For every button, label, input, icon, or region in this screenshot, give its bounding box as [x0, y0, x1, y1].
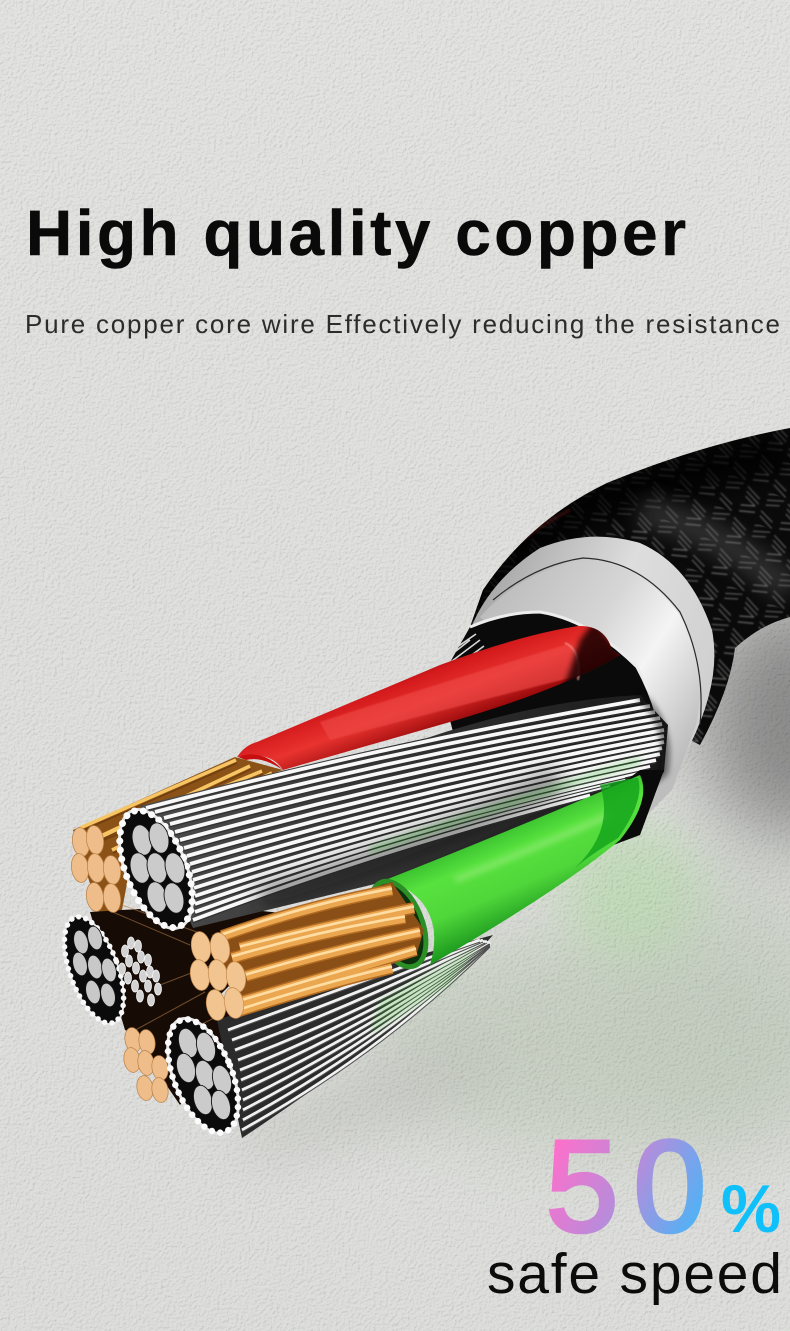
- cable shadow on wall: [217, 595, 790, 1185]
- collar inner rim: [470, 612, 663, 842]
- middle copper strands: [212, 882, 424, 1015]
- title: High quality copper: [26, 197, 686, 269]
- copper end: lower left: [122, 1026, 170, 1104]
- caption: safe speed: safe speed: [487, 1242, 782, 1306]
- copper end: upper left: [70, 824, 122, 914]
- copper end: middle: [188, 930, 248, 1022]
- silver end: upper: [105, 799, 207, 939]
- subtitle: Pure copper core wire Effectively reducing the resistance: [25, 309, 780, 339]
- lower silver strand bundle: [217, 935, 493, 1138]
- upper silver strand bundle: [140, 695, 668, 928]
- fine strands behind the red wire: [418, 634, 484, 678]
- silver metal collar: [470, 537, 714, 842]
- small silver strand cluster: [118, 937, 162, 1006]
- dark strands behind lower-left ends: [90, 905, 300, 1105]
- silver end: left: [52, 908, 136, 1032]
- stat: 50 percent: 50: [546, 1113, 706, 1259]
- collar opening: [440, 612, 663, 842]
- stat: 50 percent: [546, 1113, 781, 1259]
- gold strands of red wire: [73, 757, 283, 915]
- silver end: lower: [153, 1009, 253, 1143]
- stat: 50 percent: %: [721, 1171, 781, 1247]
- cable: braided black jacket: [470, 428, 790, 745]
- red insulated wire: [237, 620, 625, 770]
- green insulated wire: [359, 770, 664, 975]
